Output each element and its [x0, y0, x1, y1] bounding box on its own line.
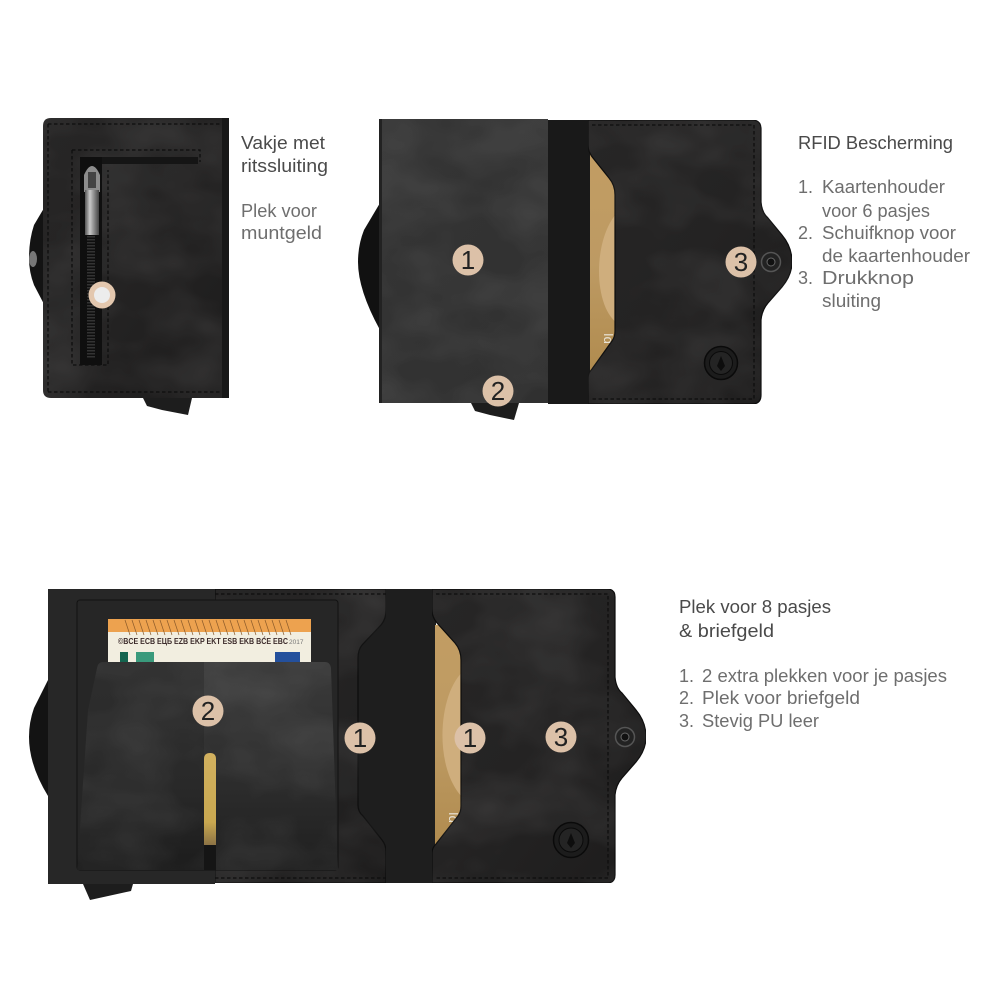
- badge 2: [482, 376, 514, 406]
- text: 8 cards and banknotes: 2 extra plekken voor je pasjes: [702, 666, 947, 686]
- inner panel: [77, 600, 338, 870]
- text: RFID protection: 3.: [798, 268, 813, 288]
- text: RFID protection: de kaartenhouder: [822, 246, 970, 266]
- wallet: front open view: [358, 119, 792, 420]
- note pocket left: [77, 662, 205, 870]
- snap tab behind wallet: [29, 203, 47, 308]
- gold card: [590, 153, 620, 375]
- left snap tab: [358, 203, 380, 330]
- text: 8 cards and banknotes: Plek voor 8 pasjes: [679, 597, 831, 617]
- text: 8 cards and banknotes: 2.: [679, 688, 694, 708]
- text: zipper compartment: muntgeld: [241, 223, 322, 243]
- text: RFID protection: 1.: [798, 177, 813, 197]
- text: 8 cards and banknotes: & briefgeld: [679, 621, 774, 641]
- snap button: [616, 728, 634, 746]
- text: 8 cards and banknotes: Stevig PU leer: [702, 711, 819, 731]
- snap button: [762, 252, 780, 272]
- badge 3: [726, 246, 756, 278]
- leather flap with snap tab: [588, 120, 792, 404]
- wallet: fully open view: [29, 589, 646, 900]
- text: RFID protection: RFID Bescherming: [798, 133, 953, 153]
- euro banknote: 2017: [289, 639, 304, 646]
- left snap tab: [29, 680, 48, 796]
- zipper puller: [84, 166, 100, 235]
- badge 2: [192, 696, 224, 726]
- leather body: [43, 118, 229, 398]
- text: 8 cards and banknotes: 3.: [679, 711, 694, 731]
- card text: Id: [446, 812, 461, 823]
- badge 3: 3: [734, 247, 748, 277]
- right leaf leather with snap tab: [432, 589, 646, 883]
- badge 1: 1: [461, 245, 475, 275]
- card slider: [471, 403, 519, 420]
- gold card: [435, 625, 465, 850]
- badge 1 right: [454, 722, 486, 754]
- middle strip: [358, 589, 436, 883]
- text: RFID protection: Schuifknop voor: [822, 223, 956, 243]
- badge 1 left: 1: [353, 723, 367, 753]
- text: RFID protection: Kaartenhouder: [822, 177, 945, 197]
- text: zipper compartment: [241, 133, 328, 243]
- text: 8 cards and banknotes: [679, 597, 947, 731]
- snap button: [29, 251, 37, 267]
- card slider: [143, 398, 192, 415]
- card slot: [204, 753, 216, 845]
- text: zipper compartment: ritssluiting: [241, 156, 328, 176]
- euro banknote: [108, 619, 311, 662]
- note pocket right: [204, 662, 338, 870]
- badge 1 left: [344, 722, 376, 754]
- wallet: back view with zipper: [29, 118, 229, 415]
- text: RFID protection: Drukknop: [822, 268, 914, 288]
- embossed logo: [704, 346, 738, 380]
- dark middle strip: [548, 120, 593, 404]
- badge 1 right: 1: [463, 723, 477, 753]
- text: 8 cards and banknotes: Plek voor briefgeld: [702, 688, 860, 708]
- card text: Id: [601, 333, 616, 344]
- badge 2: 2: [201, 696, 215, 726]
- zipper track: [80, 157, 102, 365]
- marker dot: [88, 282, 116, 308]
- text: RFID protection: 2.: [798, 223, 813, 243]
- badge 1: [452, 244, 484, 276]
- text: zipper compartment: Plek voor: [241, 201, 317, 221]
- badge 3: 3: [554, 722, 568, 752]
- badge 3: [546, 722, 576, 752]
- text: zipper compartment: Vakje met: [241, 133, 325, 153]
- badge 2: 2: [491, 376, 505, 406]
- text: RFID protection: voor 6 pasjes: [822, 201, 930, 221]
- embossed logo: [554, 822, 588, 858]
- euro banknote: ©BCE ECB ЕЦБ EZB EKP EKT ESB EKB BĆE EBC: [118, 635, 288, 646]
- metal case: [379, 119, 548, 403]
- left leaf leather: [215, 589, 386, 883]
- text: RFID protection: sluiting: [822, 291, 881, 311]
- card slider: [83, 884, 133, 900]
- metal case: [48, 589, 215, 884]
- text: RFID protection: [798, 133, 970, 311]
- text: 8 cards and banknotes: 1.: [679, 666, 694, 686]
